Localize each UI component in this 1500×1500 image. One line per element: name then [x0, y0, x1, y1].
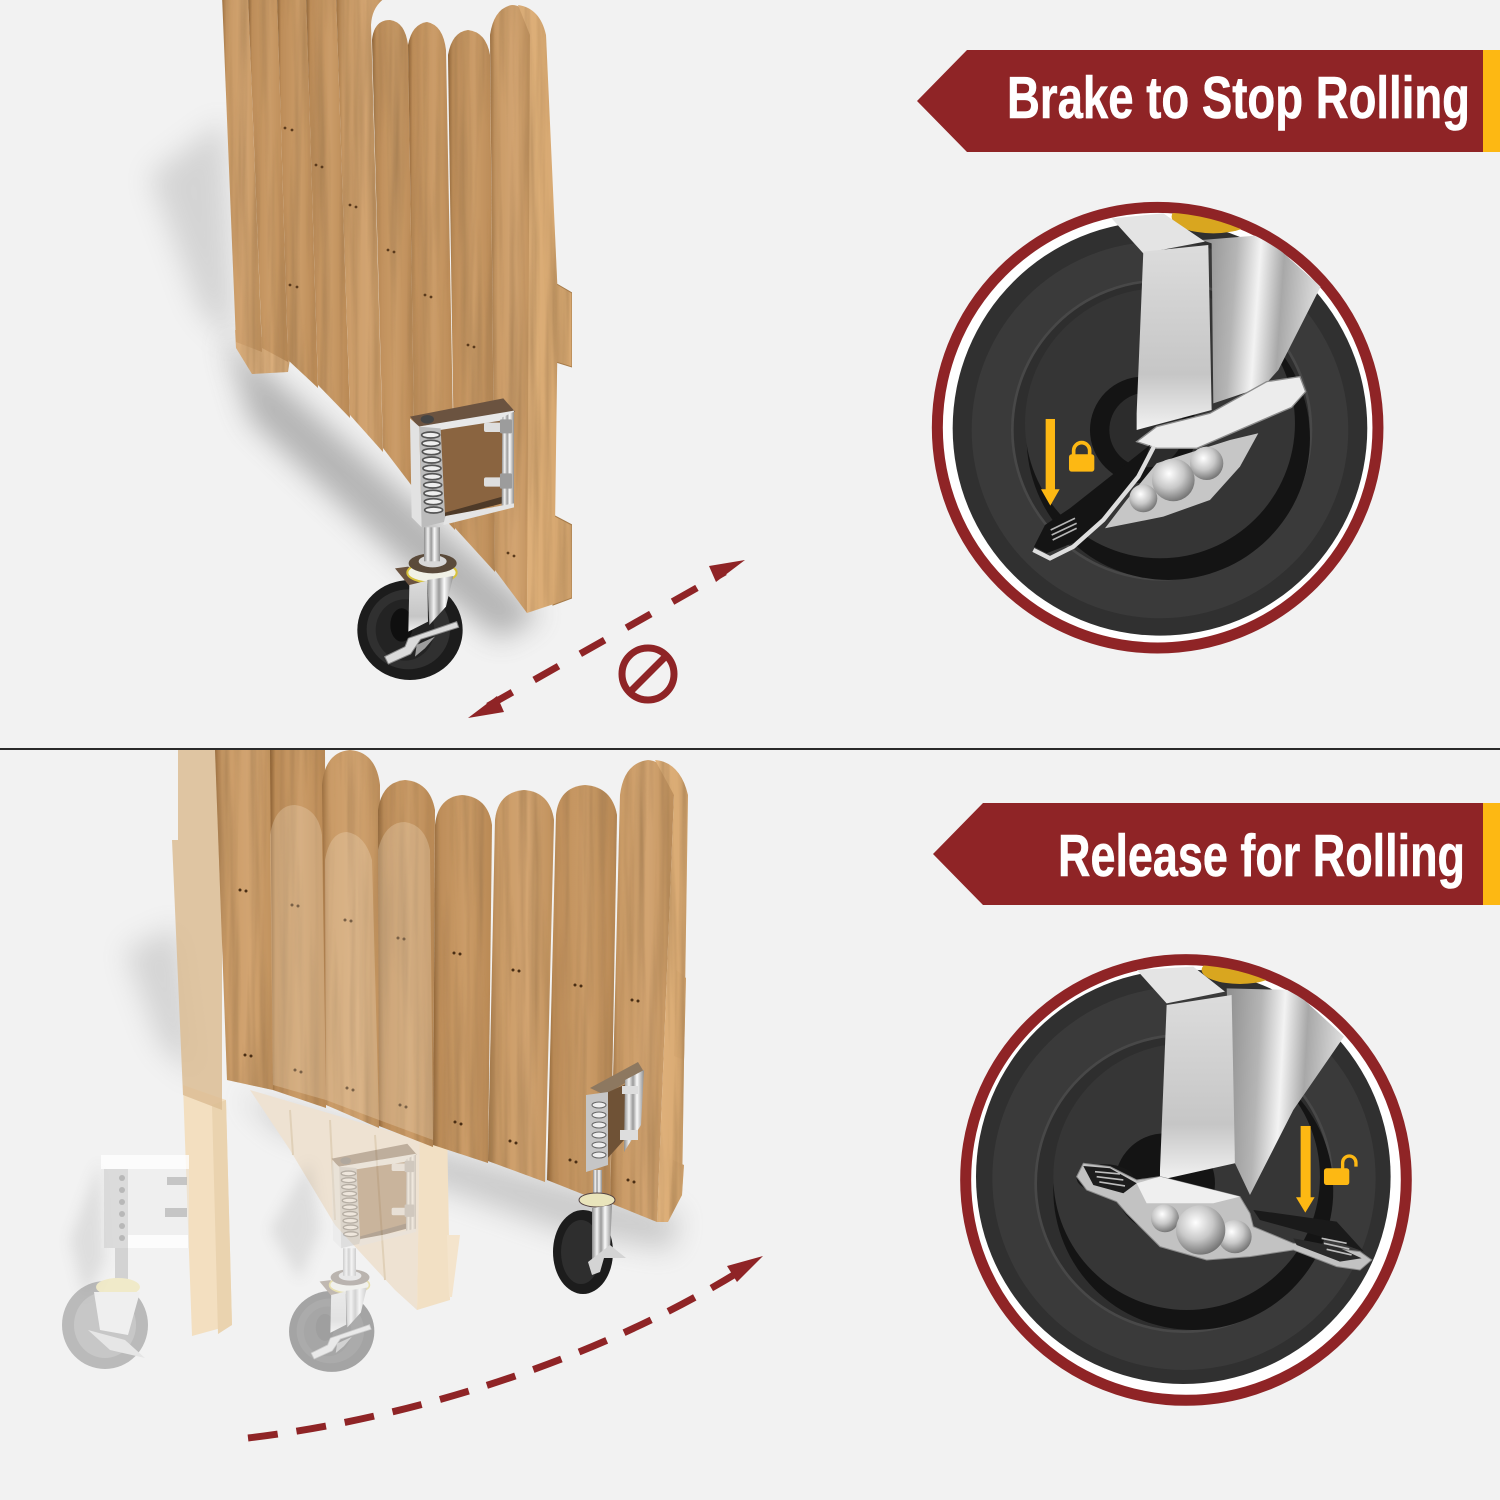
banner: release for rolling	[933, 803, 1500, 905]
ghost post, far-left position	[183, 1085, 232, 1336]
faint far shadow	[125, 925, 200, 1080]
wooden fence, closed position	[222, 0, 572, 613]
wooden fence, open position	[215, 750, 688, 1222]
nail holes	[238, 888, 640, 1184]
active caster, open position	[553, 1062, 644, 1294]
nail holes	[284, 127, 515, 557]
panel: release for rolling	[62, 750, 1500, 1438]
ghost caster, middle position	[289, 1144, 417, 1372]
detail circle: locked brake	[937, 200, 1378, 648]
banner: brake to stop rolling	[917, 50, 1500, 152]
gate caster with spring bracket	[357, 398, 515, 680]
ghost bracket, far-left position	[101, 1155, 189, 1248]
faint far shadow	[150, 120, 235, 345]
icon: open padlock	[1324, 1156, 1356, 1185]
icon: down arrow	[1296, 1126, 1315, 1213]
panel: brake to stop rolling	[150, 0, 1500, 718]
dashed curved arrow: rolling direction	[248, 1256, 763, 1438]
fence shadow on ground	[225, 335, 540, 640]
translucent ghost picket tops	[270, 805, 433, 1140]
ghost shadows	[70, 1160, 320, 1300]
dashed double arrow: no movement	[468, 560, 745, 718]
icon: prohibited sign	[622, 648, 674, 700]
detail circle: released brake	[966, 956, 1406, 1400]
icon: down arrow	[1041, 419, 1060, 506]
ghost caster, far-left position	[62, 1248, 148, 1369]
icon: locked padlock	[1069, 443, 1094, 472]
fence shadow on ground	[240, 1095, 680, 1250]
divider	[0, 748, 1500, 750]
ghost pickets, middle position	[250, 1090, 460, 1310]
ghost fence body, left	[172, 750, 222, 1110]
